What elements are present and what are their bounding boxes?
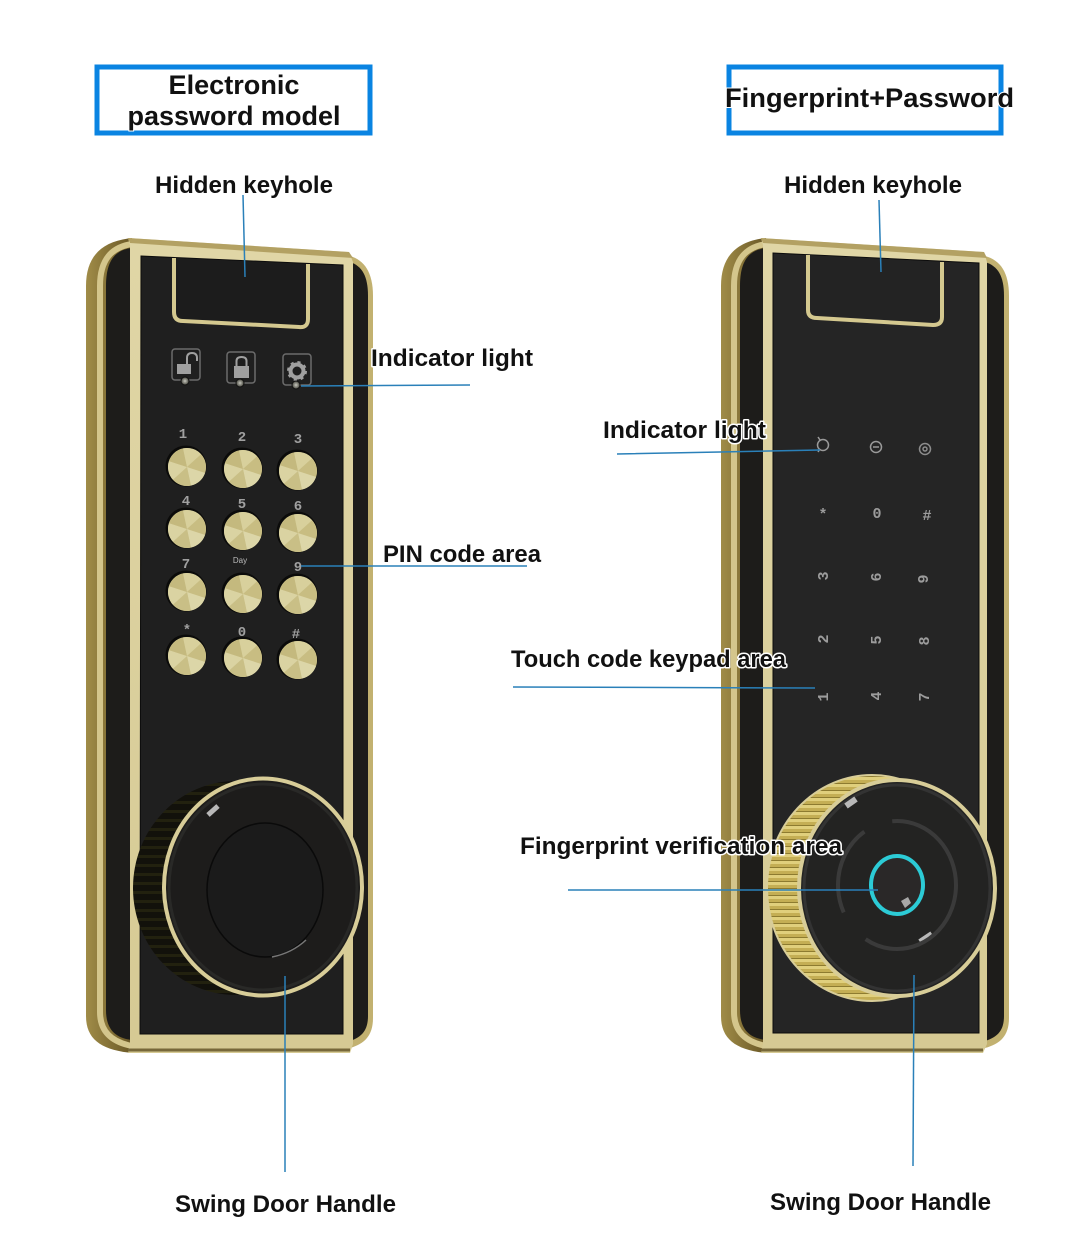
callout: right indicator light: Indicator light xyxy=(603,417,766,444)
touch keypad icons and numbers: * xyxy=(818,507,828,524)
fingerprint sensor ring xyxy=(871,856,923,914)
PIN code keypad: 4 xyxy=(182,494,190,510)
PIN code keypad: 3 xyxy=(294,432,302,448)
header: electronic password model: password model xyxy=(128,101,340,131)
icon: minus indicator xyxy=(870,442,882,452)
callout: right indicator light xyxy=(603,417,820,454)
PIN code keypad: 1 xyxy=(179,427,187,443)
PIN code keypad: 9 xyxy=(294,560,302,576)
touch keypad icons and numbers: 1 xyxy=(816,692,833,702)
icon: unlocked padlock xyxy=(172,349,200,385)
hidden keyhole cover xyxy=(174,258,308,327)
touch keypad icons and numbers: # xyxy=(922,508,932,525)
indicator icons xyxy=(172,349,311,389)
callout: left hidden keyhole: Hidden keyhole xyxy=(155,172,333,199)
callout: touch code keypad area: Touch code keypad area xyxy=(511,646,787,673)
header: fingerprint plus password xyxy=(725,67,1014,133)
PIN code keypad: 0 xyxy=(238,625,246,641)
lock body right xyxy=(721,238,1009,1053)
lock faceplate frame xyxy=(761,238,987,1053)
touch keypad icons and numbers: 0 xyxy=(872,506,882,523)
PIN code keypad: 7 xyxy=(182,557,190,573)
header: fingerprint plus password: Fingerprint+Password xyxy=(725,83,1014,113)
header: electronic password model: Electronic xyxy=(168,70,300,100)
icon: locked padlock xyxy=(227,352,255,387)
touch keypad icons and numbers: 6 xyxy=(869,572,886,582)
touch keypad icons and numbers: 9 xyxy=(916,574,933,584)
touch keypad icons and numbers xyxy=(816,437,934,702)
touch keypad icons and numbers: 4 xyxy=(869,691,886,701)
icon: clock indicator xyxy=(818,437,828,452)
callout: left indicator light: Indicator light xyxy=(371,345,533,372)
PIN code keypad: Day xyxy=(233,556,247,565)
panel: left lock, electronic password model xyxy=(86,238,373,1053)
icon: settings gear xyxy=(283,354,311,389)
touch keypad icons and numbers: 3 xyxy=(816,571,833,581)
PIN code keypad: # xyxy=(292,627,300,643)
PIN code keypad: 2 xyxy=(238,430,246,446)
touch keypad icons and numbers: 2 xyxy=(816,634,833,644)
touch keypad icons and numbers: 7 xyxy=(917,692,934,702)
swing door handle with fingerprint sensor xyxy=(767,775,995,1001)
hidden keyhole cover xyxy=(808,255,942,325)
callout: fingerprint verification area: Fingerprint verification area xyxy=(520,833,843,860)
lock body left xyxy=(86,238,373,1053)
PIN code keypad: 6 xyxy=(294,499,302,515)
touch keypad icons and numbers: 8 xyxy=(917,636,934,646)
PIN code keypad: * xyxy=(183,623,191,639)
callout: left swing door handle: Swing Door Handle xyxy=(175,1191,396,1218)
header: electronic password model xyxy=(97,67,370,133)
callout: right hidden keyhole: Hidden keyhole xyxy=(784,172,962,199)
touch keypad icons and numbers: 5 xyxy=(869,635,886,645)
callout: PIN code area: PIN code area xyxy=(383,541,542,568)
PIN code keypad xyxy=(163,427,322,684)
swing door handle knob xyxy=(133,778,362,996)
lock faceplate frame xyxy=(128,238,353,1053)
icon: target indicator xyxy=(920,444,930,454)
panel: right lock, fingerprint and password model xyxy=(721,238,1009,1053)
callout: right swing door handle: Swing Door Handle xyxy=(770,1189,991,1216)
PIN code keypad: 5 xyxy=(238,497,246,513)
